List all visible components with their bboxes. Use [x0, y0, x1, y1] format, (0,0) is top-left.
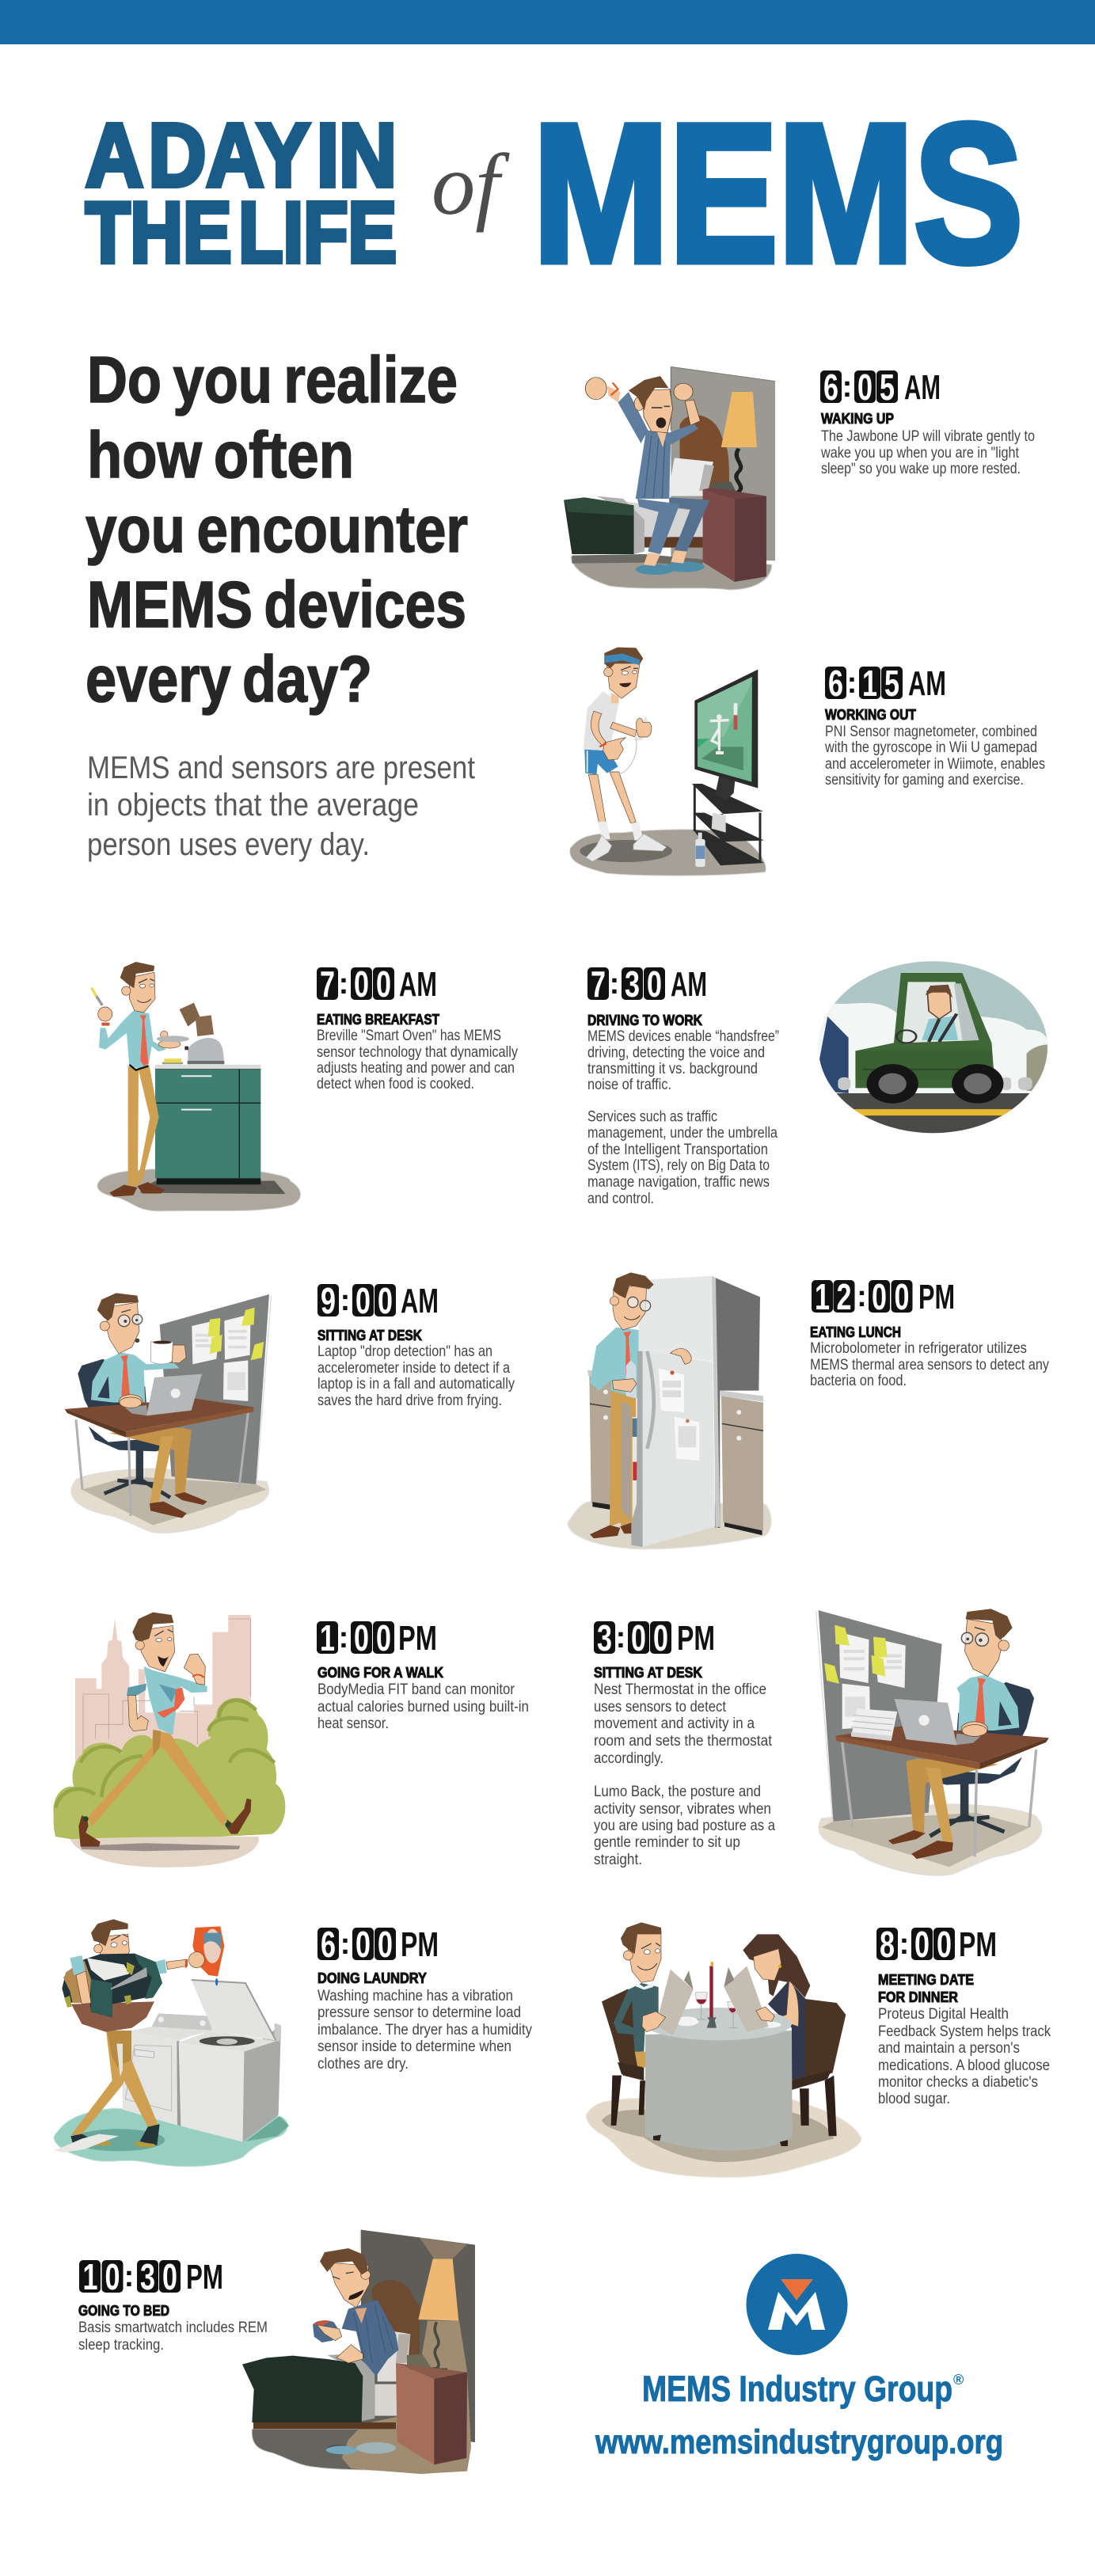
clock: 8:00 PM: 0: [937, 1924, 952, 1965]
clock: 12:00 PM: 0: [895, 1276, 909, 1317]
clock: 7:30 AM: 0: [647, 963, 662, 1005]
text block: working out: with the gyroscope in Wii U gamepad: [824, 739, 1037, 756]
clock: 12:00 PM: 0: [872, 1276, 887, 1317]
illustration: man waking up in bedroom: [564, 367, 775, 590]
clock: 10:30 PM: [79, 2256, 223, 2297]
heading: eating breakfast: EATING BREAKFAST: [317, 1012, 439, 1028]
clock: 6:15 AM: 6: [828, 663, 843, 704]
text block: sitting at desk: uses sensors to detect: [594, 1699, 727, 1715]
question heading: you encounter: [86, 492, 468, 566]
clock: 6:00 PM: [317, 1924, 439, 1965]
text block: meeting date for dinner: [878, 2006, 1051, 2107]
clock: 6:05 AM: 5: [880, 367, 895, 408]
clock: 10:30 PM: PM: [186, 2258, 223, 2297]
clock: 8:00 PM: PM: [959, 1925, 997, 1964]
text block: going for a walk: actual calories burned using built-in: [317, 1699, 529, 1715]
text block: waking up: The Jawbone UP will vibrate gently to: [821, 428, 1035, 445]
intro text: [87, 750, 475, 862]
clock: 7:30 AM: 3: [625, 963, 640, 1005]
panel: eating lunch: [568, 1272, 1049, 1549]
clock: 1:00 PM: [317, 1617, 437, 1658]
text block: working out: and accelerometer in Wiimote, enables: [825, 756, 1045, 773]
clock: 8:00 PM: :: [899, 1928, 909, 1961]
text block: doing laundry: pressure sensor to determine load: [317, 2004, 521, 2021]
illustration: couple at dinner table: [586, 1922, 861, 2178]
intro text: person uses every day.: [87, 827, 370, 862]
clock: 9:00 AM: 0: [355, 1280, 371, 1321]
clock: 10:30 PM: 3: [140, 2256, 155, 2297]
text block: sitting at desk: [317, 1343, 515, 1409]
text block: waking up: sleep" so you wake up more rested.: [821, 461, 1021, 477]
heading: meeting date for dinner: [878, 1972, 974, 2005]
text block: sitting at desk: gentle reminder to sit up: [594, 1834, 740, 1851]
clock: 3:00 PM: [594, 1617, 715, 1658]
clock: 9:00 AM: AM: [401, 1282, 439, 1320]
clock: 6:00 PM: 0: [378, 1924, 393, 1965]
clock: 9:00 AM: :: [340, 1284, 350, 1317]
illustration: man at office desk with laptop: [816, 1609, 1049, 1875]
clock: 7:00 AM: AM: [399, 965, 437, 1004]
panel: driving to work: [587, 958, 1055, 1207]
text block: going to bed: Basis smartwatch includes REM: [78, 2320, 268, 2336]
text block: waking up: [820, 428, 1035, 477]
illustration: man exercising with game console: [570, 648, 766, 876]
clock: 7:00 AM: 7: [320, 963, 335, 1005]
illustration: man at office desk with coffee: [65, 1293, 272, 1533]
panel: going for a walk: [53, 1613, 529, 1867]
clock: 3:00 PM: PM: [677, 1619, 715, 1658]
text block: working out: [824, 724, 1045, 788]
clock: 8:00 PM: 8: [880, 1924, 895, 1965]
clock: 6:05 AM: AM: [904, 368, 941, 407]
text block: driving to work: manage navigation, traffic news: [587, 1174, 770, 1191]
text block: going to bed: [78, 2320, 268, 2354]
footer: MEMS Industry Group logo: [595, 2254, 1003, 2461]
clock: 7:30 AM: :: [610, 967, 619, 1001]
text block: doing laundry: sensor inside to determine when: [317, 2038, 511, 2055]
clock: 7:30 AM: [587, 963, 707, 1005]
clock: 12:00 PM: 2: [836, 1276, 852, 1317]
text block: sitting at desk: room and sets the thermostat: [594, 1733, 773, 1750]
text block: eating breakfast: adjusts heating and power and can: [317, 1060, 515, 1077]
text block: going for a walk: [317, 1681, 529, 1732]
text block: working out: sensitivity for gaming and exercise.: [825, 772, 1024, 788]
text block: eating lunch: bacteria on food.: [810, 1373, 907, 1389]
text block: driving to work: transmitting it vs. background: [587, 1061, 758, 1077]
clock: 9:00 AM: 9: [321, 1280, 336, 1321]
text block: eating lunch: MEMS thermal area sensors to detect any: [810, 1357, 1049, 1373]
text block: sitting at desk: activity sensor, vibrates when: [594, 1801, 771, 1818]
clock: 3:00 PM: 0: [653, 1617, 668, 1658]
clock: 6:05 AM: 0: [857, 367, 873, 408]
intro text: MEMS and sensors are present: [87, 750, 475, 785]
sub-element: arm with coffee mug: [135, 1339, 186, 1370]
text block: eating breakfast: [317, 1028, 518, 1092]
text block: working out: PNI Sensor magnetometer, combined: [825, 724, 1037, 740]
text block: doing laundry: imbalance. The dryer has a humidity: [317, 2022, 532, 2038]
text block: sitting at desk: Laptop "drop detection" has an: [317, 1343, 492, 1360]
text block: driving to work: Services such as traffic: [587, 1108, 717, 1126]
clock: 12:00 PM: :: [857, 1280, 867, 1313]
text block: driving to work: and control.: [587, 1191, 654, 1207]
text block: meeting date for dinner: Feedback System helps track: [878, 2023, 1051, 2040]
clock: 3:00 PM: 0: [631, 1617, 646, 1658]
question heading: Do you realize: [87, 343, 458, 416]
clock: 8:00 PM: 0: [914, 1924, 930, 1965]
text block: sitting at desk: Lumo Back, the posture and: [594, 1784, 761, 1800]
text block: sitting at desk: movement and activity in a: [594, 1715, 755, 1732]
heading: driving to work: DRIVING TO WORK: [587, 1013, 702, 1028]
panel: sitting at desk 9:00: [65, 1280, 515, 1533]
clock: 6:05 AM: 6: [823, 367, 838, 408]
clock: 12:00 PM: 1: [815, 1276, 830, 1317]
text block: going for a walk: heat sensor.: [317, 1715, 389, 1732]
logo badge: [746, 2254, 847, 2355]
clock: 6:15 AM: 1: [862, 663, 877, 704]
title line: a day in: A DAY IN: [86, 105, 397, 205]
text block: meeting date for dinner: and maintain a person's: [878, 2040, 1020, 2057]
heading: working out: WORKING OUT: [825, 707, 916, 723]
text block: eating breakfast: sensor technology that dynamically: [317, 1044, 518, 1061]
clock: 7:30 AM: AM: [671, 965, 707, 1004]
illustration: man carrying laundry basket to washer: [54, 1919, 289, 2167]
clock: 9:00 AM: [317, 1280, 439, 1321]
clock: 10:30 PM: 1: [82, 2256, 98, 2297]
text block: sitting at desk: Nest Thermostat in the office: [594, 1681, 766, 1698]
text block: driving to work: MEMS devices enable “handsfree”: [587, 1028, 779, 1045]
clock: 7:30 AM: 7: [591, 963, 606, 1005]
text block: sitting at desk: laptop is in a fall and automatically: [317, 1376, 515, 1392]
heading: doing laundry: DOING LAUNDRY: [317, 1970, 427, 1986]
clock: 7:00 AM: 0: [376, 963, 391, 1005]
clock: 6:00 PM: 0: [355, 1924, 371, 1965]
text block: driving to work: noise of traffic.: [587, 1077, 671, 1093]
illustration: man at refrigerator: [568, 1272, 771, 1549]
text block: driving to work: of the Intelligent Transportation: [587, 1142, 768, 1158]
text block: sitting at desk: accelerometer inside to detect if a: [317, 1360, 510, 1377]
text block: meeting date for dinner: medications. A blood glucose: [878, 2057, 1050, 2074]
illustration: man at kitchen counter with toaster: [92, 962, 301, 1211]
text block: eating lunch: [810, 1340, 1049, 1389]
sub-element: stack of papers: [851, 1708, 897, 1741]
title line: the life: THE LIFE: [86, 184, 397, 281]
clock: 12:00 PM: [812, 1276, 955, 1317]
text block: meeting date for dinner: Proteus Digital Health: [878, 2006, 1009, 2023]
panel: doing laundry: [54, 1919, 532, 2167]
website url: www.memsindustrygroup.org: [595, 2423, 1003, 2461]
clock: 8:00 PM: [876, 1924, 997, 1965]
question heading: MEMS devices: [87, 568, 466, 641]
heading: going for a walk: GOING FOR A WALK: [317, 1665, 443, 1681]
text block: sitting at desk: saves the hard drive from frying.: [317, 1392, 502, 1409]
panel: waking up: [564, 367, 1035, 590]
clock: 6:00 PM: :: [340, 1928, 350, 1961]
organisation name: MEMS Industry Group: [642, 2369, 952, 2409]
title: [86, 83, 1023, 303]
clock: 10:30 PM: 0: [162, 2256, 177, 2297]
panel: working out: [570, 648, 1045, 876]
clock: 6:15 AM: :: [847, 667, 857, 700]
registered mark: ®: [953, 2372, 964, 2388]
heading: sitting at desk: SITTING AT DESK: [317, 1328, 422, 1343]
clock: 10:30 PM: :: [124, 2260, 134, 2293]
heading: going to bed: GOING TO BED: [78, 2303, 169, 2319]
heading: meeting date for dinner: MEETING DATE: [878, 1972, 974, 1988]
clock: 6:15 AM: 5: [884, 663, 899, 704]
text block: doing laundry: Washing machine has a vibration: [317, 1988, 513, 2004]
clock: 3:00 PM: :: [616, 1621, 625, 1655]
clock: 6:15 AM: AM: [908, 664, 946, 703]
panel: going to bed: [78, 2230, 475, 2474]
title word: of: of: [432, 136, 511, 233]
question heading: [86, 343, 468, 716]
clock: 10:30 PM: 0: [105, 2256, 120, 2297]
clock: 9:00 AM: 0: [378, 1280, 393, 1321]
clock: 6:00 PM: 6: [321, 1924, 336, 1965]
illustration: man walking past bushes and city: [53, 1613, 285, 1867]
top banner: [0, 0, 1095, 44]
clock: 1:00 PM: PM: [398, 1619, 437, 1658]
illustration: man going to bed at night: [242, 2230, 475, 2474]
panel: sitting at desk 3:00: [594, 1609, 1049, 1875]
clock: 1:00 PM: :: [339, 1621, 348, 1655]
clock: 1:00 PM: 0: [354, 1617, 369, 1658]
text block: driving to work: [587, 1028, 779, 1207]
question heading: how often: [87, 418, 354, 492]
clock: 7:00 AM: :: [339, 967, 348, 1001]
clock: 3:00 PM: 3: [597, 1617, 612, 1658]
clock: 6:05 AM: [820, 367, 941, 408]
text block: going to bed: sleep tracking.: [78, 2337, 164, 2354]
text block: doing laundry: clothes are dry.: [317, 2056, 409, 2073]
panel: eating breakfast: [92, 962, 518, 1211]
text block: sitting at desk: you are using bad posture as a: [594, 1818, 775, 1834]
clock: 1:00 PM: 1: [320, 1617, 335, 1658]
clock: 6:05 AM: :: [842, 370, 852, 404]
text block: doing laundry: [317, 1988, 532, 2073]
text block: driving to work: management, under the umbrella: [587, 1125, 778, 1142]
clock: 6:00 PM: PM: [401, 1925, 439, 1964]
text block: going for a walk: BodyMedia FIT band can monitor: [317, 1681, 515, 1698]
heading: sitting at desk: SITTING AT DESK: [594, 1665, 702, 1681]
clock: 1:00 PM: 0: [376, 1617, 391, 1658]
text block: eating breakfast: detect when food is cooked.: [317, 1076, 474, 1092]
text block: driving to work: System (ITS), rely on Big Data to: [587, 1157, 770, 1174]
heading: waking up: WAKING UP: [821, 411, 894, 427]
text block: eating lunch: Microbolometer in refrigerator utilizes: [810, 1340, 1027, 1357]
question heading: every day?: [86, 642, 372, 716]
intro text: in objects that the average: [87, 788, 419, 823]
heading: meeting date for dinner: FOR DINNER: [878, 1989, 958, 2005]
text block: sitting at desk: straight.: [594, 1852, 642, 1868]
heading: eating lunch: EATING LUNCH: [810, 1324, 901, 1340]
illustration: man driving green car: [814, 958, 1055, 1136]
text block: meeting date for dinner: monitor checks a diabetic's: [878, 2074, 1038, 2091]
panel: meeting date for dinner: [586, 1922, 1051, 2178]
text block: waking up: wake you up when you are in "light: [820, 445, 1020, 462]
clock: 12:00 PM: PM: [918, 1278, 955, 1316]
text block: sitting at desk: accordingly.: [594, 1750, 663, 1767]
text block: driving to work: driving, detecting the voice and: [587, 1045, 765, 1061]
clock: 7:00 AM: 0: [354, 963, 369, 1005]
text block: meeting date for dinner: blood sugar.: [878, 2091, 950, 2107]
text block: eating breakfast: Breville "Smart Oven" has MEMS: [317, 1028, 501, 1044]
clock: 6:15 AM: [825, 663, 946, 704]
clock: 7:00 AM: [317, 963, 437, 1005]
text block: sitting at desk: [594, 1681, 775, 1868]
